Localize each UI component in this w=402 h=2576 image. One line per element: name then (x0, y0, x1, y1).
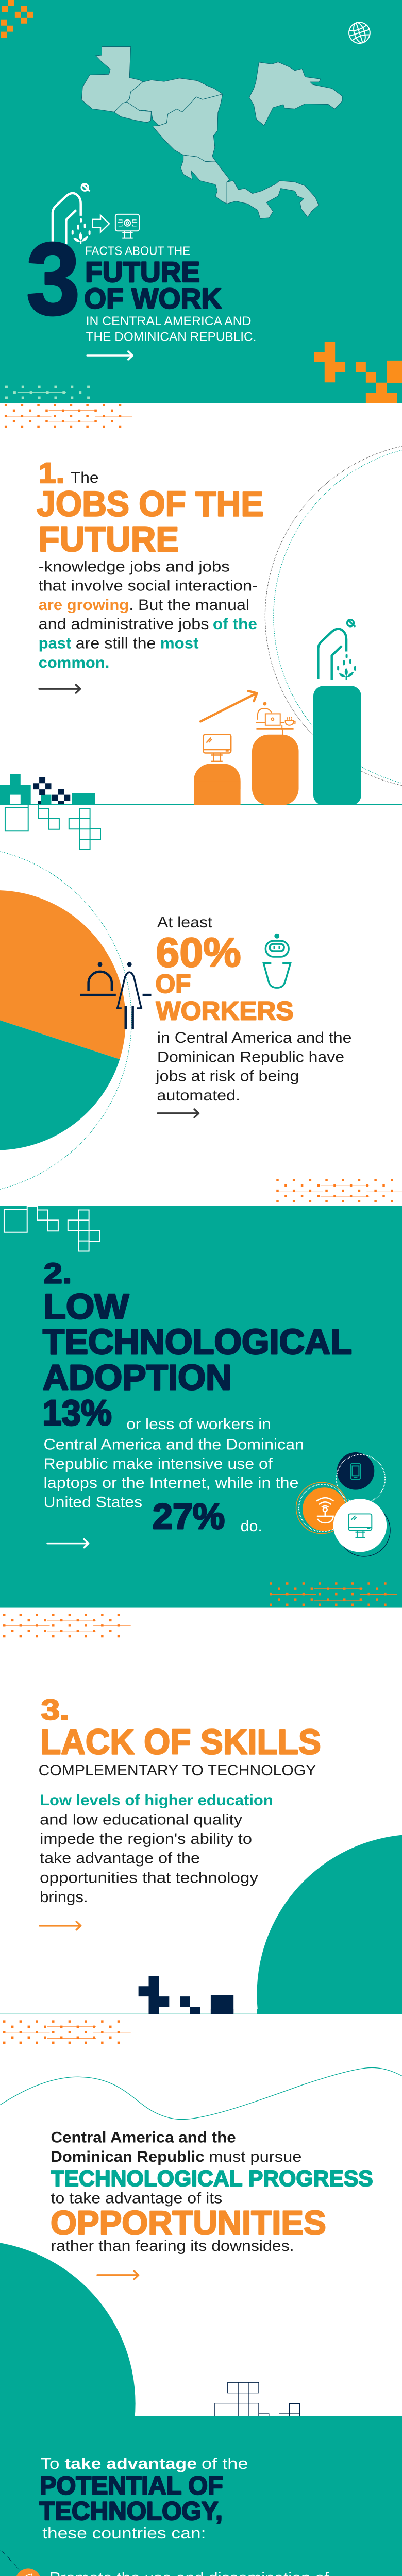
dotted arc (0, 2503, 57, 2576)
arrow (39, 685, 80, 693)
title: THE DOMINICAN REPUBLIC. (86, 330, 256, 344)
message text: TECHNOLOGICAL PROGRESS (51, 2166, 373, 2191)
arrow (47, 1539, 89, 1548)
wave line (0, 2067, 402, 2120)
heading: JOBS OF THE (37, 484, 263, 523)
icon: robot (263, 934, 291, 988)
arrow (97, 2271, 139, 2279)
heading (43, 1258, 352, 1397)
orange pixel cluster bottom right (314, 342, 402, 403)
teal pixel cluster (0, 774, 95, 804)
message text: Dominican Republic (51, 2148, 204, 2165)
panel: fact 2 low technological adoption (4, 1206, 397, 1605)
item 1: technology in agriculture (15, 2568, 342, 2576)
stat text: At least (157, 914, 213, 931)
teal circle (257, 1834, 402, 2155)
body text: are still the (76, 635, 156, 652)
body text: of the (213, 616, 257, 633)
orange dot pattern (3, 2022, 131, 2043)
message text: Central America and the (51, 2129, 236, 2146)
heading (37, 457, 263, 559)
background: recommendations panel (0, 2416, 402, 2576)
body text: Central America and the Dominican (44, 1436, 304, 1453)
icon: desktop monitor (203, 734, 231, 761)
stat 13 percent: 13% (42, 1393, 112, 1433)
heading: POTENTIAL OF (40, 2471, 223, 2500)
arrow (158, 1109, 199, 1117)
background: closing message panel (0, 2014, 402, 2416)
body text: do. (241, 1518, 262, 1535)
body text: that involve social interaction- (39, 578, 258, 595)
title: FACTS ABOUT THE (85, 244, 190, 258)
dotted gray circle (265, 443, 402, 789)
map: Central America and the Dominican Republic (81, 47, 342, 218)
dotted teal circle (0, 846, 131, 1195)
trend arrow (200, 691, 257, 721)
icon: flask with seedling (318, 620, 355, 680)
stat text: WORKERS (156, 996, 294, 1025)
heading: 1. (39, 457, 65, 489)
body text: in Central America and the (157, 1029, 352, 1046)
heading: FUTURE (39, 519, 179, 559)
panel: automation risk (0, 804, 402, 1201)
body text: past (39, 635, 71, 652)
pie chart: 60 percent (0, 890, 126, 1150)
body text: or less of workers in (126, 1416, 271, 1433)
body text: . But the manual (129, 597, 249, 614)
icon: workers (80, 962, 151, 1029)
background: fact three panel (0, 1607, 402, 2014)
body text (39, 558, 258, 671)
heading (39, 1693, 321, 1779)
body text: most (160, 635, 199, 652)
title: OF WORK (84, 282, 222, 314)
body text: opportunities that technology (40, 1869, 258, 1886)
pixels continuing from the panel above (149, 2009, 402, 2014)
teal circle (0, 2241, 136, 2567)
message text (51, 2129, 373, 2255)
navy pixel cluster (33, 777, 70, 804)
icon: world bank globe (346, 20, 373, 46)
arrow (87, 351, 132, 360)
heading: LOW (44, 1286, 129, 1326)
mint dot pattern (0, 387, 100, 398)
panel: fact 3 lack of skills (3, 1615, 402, 2155)
orange pixel cluster top left (1, 0, 34, 38)
heading: these countries can: (42, 2524, 206, 2542)
body text (44, 1416, 304, 1535)
stat 27 percent: 27% (153, 1496, 225, 1536)
body text: -knowledge jobs and jobs (39, 558, 230, 575)
heading: 2. (44, 1258, 72, 1290)
stat text: 60% (156, 929, 241, 975)
teal outline pixels (5, 804, 100, 850)
stat text (155, 914, 294, 1025)
heading: To (41, 2454, 59, 2472)
icon: outlined arrow (93, 215, 109, 232)
icon: flask with seedling (53, 184, 90, 244)
message text: rather than fearing its downsides. (51, 2238, 294, 2255)
background: fact one panel (0, 403, 402, 804)
heading (39, 2454, 248, 2542)
body text: Dominican Republic have (157, 1048, 344, 1065)
bar chart: job growth (194, 686, 361, 805)
heading: of the (202, 2454, 248, 2472)
heading: The (71, 469, 99, 486)
big number 3: 3 (26, 222, 80, 336)
icon: computer with gear (115, 214, 139, 238)
body text: automated. (157, 1087, 240, 1104)
body text: impede the region's ability to (40, 1831, 252, 1848)
orange dot pattern (3, 1615, 131, 1636)
body text: jobs at risk of being (155, 1068, 299, 1085)
body text: and low educational quality (40, 1811, 242, 1828)
body text (155, 1029, 352, 1104)
background: cover panel (0, 0, 402, 403)
body text: laptops or the Internet, while in the (44, 1475, 299, 1492)
title: FUTURE (85, 256, 200, 288)
panel: fact 1 jobs of the future (0, 405, 402, 805)
orange dot pattern (270, 1583, 397, 1605)
message text: must pursue (209, 2148, 301, 2165)
dotted teal circle (274, 445, 402, 789)
background: fact automation panel (0, 805, 402, 1206)
heading: TECHNOLOGICAL (43, 1322, 352, 1362)
body text: and administrative jobs (39, 616, 209, 633)
stat text: OF (155, 969, 191, 998)
icon cluster: phone, wifi, monitor (296, 1452, 390, 1556)
orange dot pattern (276, 1180, 402, 1201)
heading: LACK OF SKILLS (40, 1722, 321, 1762)
body text: are growing (39, 597, 129, 614)
title (84, 244, 256, 344)
body text: take advantage of the (40, 1850, 200, 1867)
body text: United States (44, 1494, 142, 1511)
body text: common. (39, 654, 109, 671)
heading: 3. (41, 1693, 69, 1725)
heading: TECHNOLOGY, (39, 2497, 223, 2526)
panel: cover (0, 0, 402, 403)
white outline pixels (4, 1206, 99, 1251)
body text (40, 1792, 273, 1906)
body text: Republic make intensive use of (44, 1455, 273, 1472)
background: fact two panel (0, 1206, 402, 1607)
heading: take advantage (64, 2454, 197, 2472)
arrow (40, 1922, 81, 1930)
heading: ADOPTION (43, 1358, 231, 1397)
navy outline pixels (215, 2382, 300, 2417)
title: IN CENTRAL AMERICA AND (86, 314, 252, 328)
message text: OPPORTUNITIES (51, 2204, 326, 2242)
body text: brings. (40, 1889, 88, 1906)
heading: COMPLEMENTARY TO TECHNOLOGY (39, 1762, 316, 1779)
message text: to take advantage of its (51, 2190, 222, 2207)
panel: pursue technological progress (0, 2022, 402, 2567)
orange dot pattern (5, 405, 132, 427)
panel: recommendations (0, 2454, 396, 2576)
navy pixel cluster (139, 1976, 233, 2015)
icon: laptop worker (256, 703, 295, 735)
body text: Low levels of higher education (40, 1792, 273, 1809)
